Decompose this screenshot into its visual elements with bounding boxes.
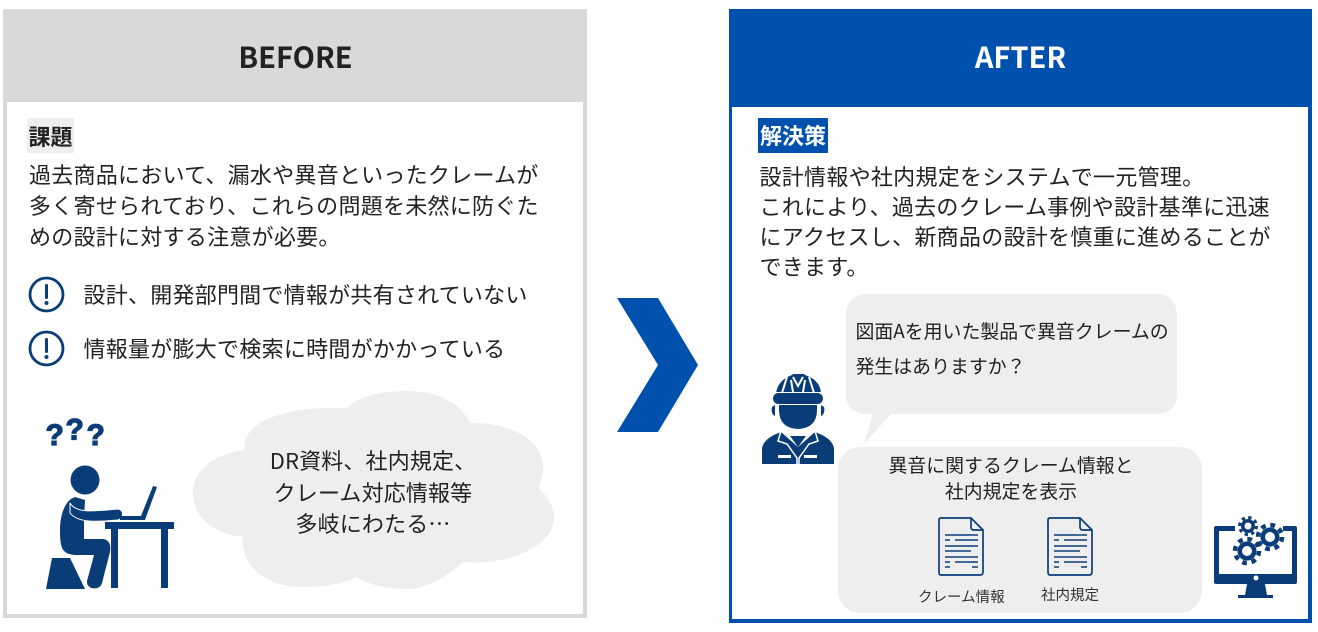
cloud callout xyxy=(193,391,554,589)
after description: できます。 xyxy=(760,250,869,282)
question text: 発生はありますか？ xyxy=(856,352,1026,379)
question speech bubble xyxy=(846,294,1177,444)
question text xyxy=(856,317,1169,379)
cloud text: クレーム対応情報等 xyxy=(274,476,472,508)
icon: confused person at laptop: ? xyxy=(46,419,64,452)
icon: confused person at laptop xyxy=(46,414,174,589)
icon: document 1 xyxy=(938,517,984,576)
question text: 図面Aを用いた製品で異音クレームの xyxy=(856,317,1169,344)
cloud text xyxy=(270,444,476,539)
icon: exclamation 2 xyxy=(28,330,64,366)
before description: 多く寄せられており、これらの問題を未然に防ぐた xyxy=(29,189,539,221)
answer panel xyxy=(838,447,1202,613)
answer text xyxy=(888,451,1134,504)
before header: BEFORE xyxy=(238,35,353,77)
issue 2 text: 情報量が膨大で検索に時間がかかっている xyxy=(84,332,505,364)
before tag: 課題: 課題 xyxy=(28,120,72,152)
cloud text: DR資料、社内規定、 xyxy=(270,444,476,476)
after description: にアクセスし、新商品の設計を慎重に進めることが xyxy=(760,220,1271,252)
icon: monitor with gears xyxy=(1214,516,1297,598)
before description: 過去商品において、漏水や異音といったクレームが xyxy=(29,158,539,190)
answer text: 異音に関するクレーム情報と xyxy=(888,451,1134,478)
icon: confused person at laptop: ? xyxy=(66,414,84,446)
icon: worker with helmet xyxy=(762,374,834,464)
after header xyxy=(729,9,1312,107)
before description: めの設計に対する注意が必要。 xyxy=(29,220,341,252)
issue 1 xyxy=(28,276,528,312)
panel: before xyxy=(3,10,587,618)
icon: confused person at laptop: ? xyxy=(86,419,105,452)
icon: document 2 xyxy=(1047,517,1093,576)
panel: after xyxy=(729,10,1312,623)
before header xyxy=(4,9,587,102)
before description xyxy=(29,158,539,252)
issue 2 xyxy=(28,330,505,366)
label: 社内規定: 社内規定 xyxy=(1041,584,1099,605)
after description: これにより、過去のクレーム事例や設計基準に迅速 xyxy=(760,190,1270,222)
label: クレーム情報: クレーム情報 xyxy=(918,586,1005,607)
arrow: chevron xyxy=(617,298,698,432)
after header: AFTER xyxy=(975,35,1066,77)
answer text: 社内規定を表示 xyxy=(945,477,1077,504)
after tag: 解決策: 解決策 xyxy=(760,119,826,151)
after description: 設計情報や社内規定をシステムで一元管理。 xyxy=(760,160,1204,192)
after description xyxy=(760,160,1271,282)
icon: exclamation 1 xyxy=(28,276,64,312)
issue 1 text: 設計、開発部門間で情報が共有されていない xyxy=(84,278,528,310)
cloud text: 多岐にわたる… xyxy=(295,507,451,539)
